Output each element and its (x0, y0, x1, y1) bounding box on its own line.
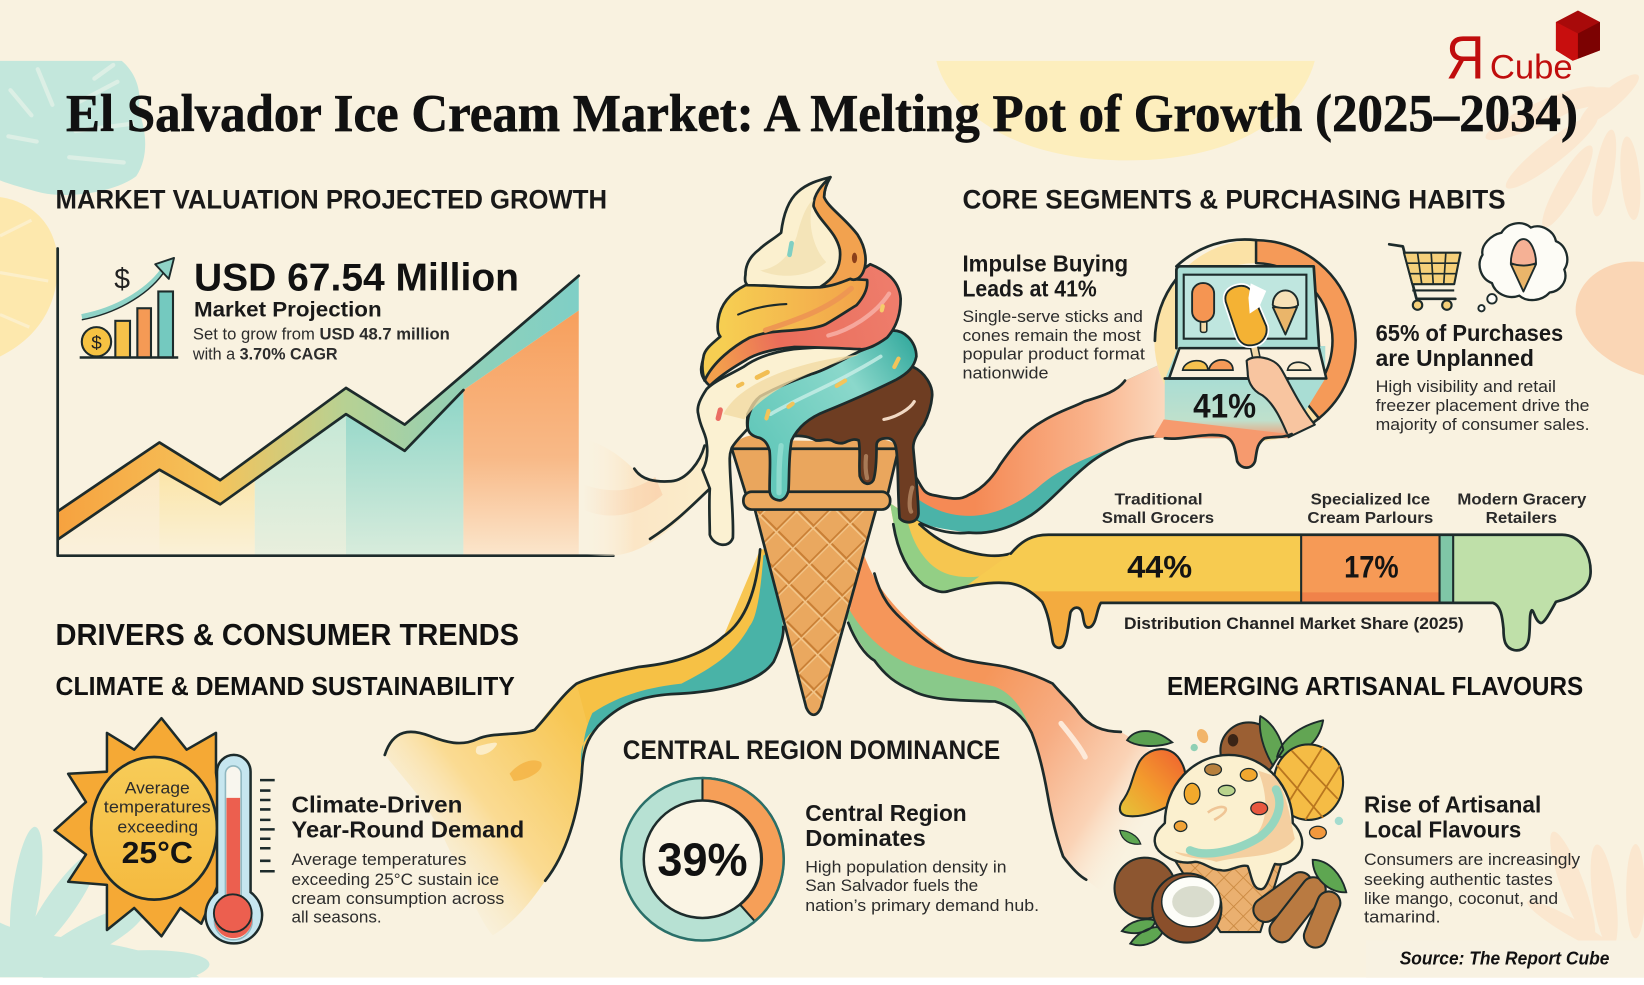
donut: 39% central region: 39% (657, 833, 748, 885)
teal scoop (748, 331, 916, 500)
text block: unplanned purchases: 65% of Purchases (1376, 320, 1563, 346)
text block: climate driven: Year-Round Demand (291, 817, 524, 843)
cone (1173, 858, 1283, 932)
text block: central region: San Salvador fuels the (805, 877, 978, 895)
icon: sun: temperatures (104, 799, 211, 817)
text block: climate driven: Climate-Driven (291, 792, 462, 818)
market projection text block: with a 3.70% CAGR (192, 346, 338, 364)
donut: 41% impulse with freezer (1153, 239, 1356, 468)
stacked bar: distribution share: 44% (1127, 550, 1192, 585)
popsicle (1192, 283, 1214, 332)
chocolate scoop (794, 349, 932, 522)
text block: unplanned purchases: freezer placement drive the (1376, 397, 1589, 415)
ice cream cone illustration (698, 177, 932, 715)
text block: climate driven (291, 792, 524, 927)
artisanal ice cream illustration (1115, 716, 1346, 951)
heading: market valuation: MARKET VALUATION PROJECTED GROWTH (56, 184, 607, 215)
mango (1120, 731, 1185, 816)
text block: unplanned purchases (1376, 320, 1589, 434)
stacked bar: distribution share (946, 533, 1592, 652)
icon: growth bars and coin (80, 258, 178, 358)
text block: impulse buying: Impulse Buying (962, 251, 1128, 277)
cone icon (1273, 290, 1298, 334)
text block: climate driven: Average temperatures (291, 851, 467, 869)
text block: central region: Central Region (805, 800, 967, 826)
text block: central region: nation’s primary demand hub. (805, 897, 1039, 915)
coral band (701, 264, 901, 386)
text block: central region: High population density in (805, 858, 1007, 876)
text block: climate driven: exceeding 25°C sustain ice (291, 871, 499, 889)
ribbon: cone to artisanal panel (839, 540, 1159, 928)
market projection text block: Set to grow from USD 48.7 million (193, 326, 450, 344)
text block: impulse buying (962, 251, 1145, 383)
donut: 39% central region (621, 778, 784, 940)
icon: shopping cart (1389, 244, 1461, 310)
channel labels: Modern Gracery (1457, 491, 1587, 508)
channel labels: Traditional (1115, 491, 1203, 508)
channel labels: Retailers (1486, 510, 1557, 527)
text block: artisanal flavours: like mango, coconut, and (1364, 890, 1558, 908)
market projection text block (192, 256, 519, 364)
freezer (1165, 266, 1326, 438)
small fruit bits (1120, 727, 1343, 844)
area chart: market growth (58, 248, 613, 556)
ribbon: cone to distribution bar (890, 503, 1048, 592)
text block: impulse buying: popular product format (962, 346, 1145, 364)
ribbon: melted cream to market panel (583, 438, 734, 556)
market projection text block: USD 67.54 Million (194, 256, 519, 299)
text block: impulse buying: Single-serve sticks and (962, 308, 1143, 326)
heading: emerging flavours: EMERGING ARTISANAL FLAVOURS (1167, 671, 1583, 701)
stacked bar: distribution share: 17% (1344, 550, 1399, 585)
heading: central region: CENTRAL REGION DOMINANCE (623, 734, 1000, 765)
yellow band (702, 278, 867, 381)
mango cubes (1274, 744, 1343, 820)
text block: climate driven: cream consumption across (291, 890, 504, 908)
stacked bar: distribution share: Distribution Channel Market Share (2025) (1124, 614, 1464, 633)
icon: sun: exceeding (117, 818, 198, 836)
tamarind pods (1249, 868, 1344, 951)
held popsicle (1223, 281, 1280, 366)
ribbon: cone to freezer circle (902, 362, 1166, 533)
whole coconut (1115, 858, 1175, 918)
title: El Salvador Ice Cream Market: A Melting Pot of Growth (2025–2034) (66, 85, 1578, 143)
text block: artisanal flavours: seeking authentic tastes (1364, 871, 1553, 889)
icon: sun (55, 718, 222, 936)
icon: sun: Average (125, 780, 190, 798)
icon: thought bubble with cone (1478, 223, 1567, 311)
cup (732, 435, 899, 510)
brown nut (1220, 722, 1277, 779)
heading: core segments: CORE SEGMENTS & PURCHASING HABITS (962, 184, 1506, 215)
text block: artisanal flavours: Local Flavours (1364, 817, 1521, 843)
text block: artisanal flavours: tamarind. (1364, 909, 1441, 927)
text block: artisanal flavours (1364, 792, 1581, 927)
text block: artisanal flavours: Rise of Artisanal (1364, 792, 1541, 818)
top swirl (745, 177, 849, 287)
logo: R Cube: Я (1446, 24, 1485, 92)
coconut halves and leaves (1122, 873, 1221, 945)
text block: unplanned purchases: majority of consumer sales. (1376, 416, 1589, 434)
text block: artisanal flavours: Consumers are increasingly (1364, 851, 1581, 869)
text block: unplanned purchases: High visibility and retail (1376, 378, 1556, 396)
channel labels: Cream Parlours (1307, 510, 1434, 527)
text block: impulse buying: cones remain the most (962, 327, 1141, 345)
source patch (1366, 940, 1644, 978)
channel labels: Specialized Ice (1311, 491, 1430, 508)
channel labels: Small Grocers (1102, 510, 1214, 527)
text block: impulse buying: nationwide (962, 365, 1048, 383)
market projection text block: Market Projection (194, 299, 382, 322)
channel labels (1102, 491, 1587, 527)
text block: unplanned purchases: are Unplanned (1376, 345, 1534, 371)
orange drip (1153, 419, 1290, 468)
cream scoop (698, 346, 873, 545)
icon: growth bars and coin: $ (114, 262, 130, 294)
source note: Source: The Report Cube (1400, 948, 1609, 969)
value 41%: 41% (1193, 387, 1256, 425)
text block: impulse buying: Leads at 41% (962, 276, 1097, 302)
scoop (1155, 755, 1302, 889)
text block: central region (805, 800, 1039, 915)
ribbon: cone to climate panel (385, 549, 783, 935)
icon: thermometer (206, 755, 275, 943)
icon: growth bars and coin: $ (91, 332, 102, 353)
logo: R Cube (1446, 10, 1600, 92)
heading: climate: CLIMATE & DEMAND SUSTAINABILITY (56, 671, 515, 701)
heading: drivers: DRIVERS & CONSUMER TRENDS (56, 618, 519, 652)
hand (1247, 357, 1315, 437)
leaves (1260, 716, 1323, 765)
text block: climate driven: all seasons. (291, 909, 382, 927)
waffle cone (755, 507, 877, 715)
text block: central region: Dominates (805, 825, 926, 851)
logo: R Cube: Cube (1490, 49, 1573, 87)
icon: sun: 25°C (122, 836, 193, 870)
inclusions (1174, 764, 1268, 831)
